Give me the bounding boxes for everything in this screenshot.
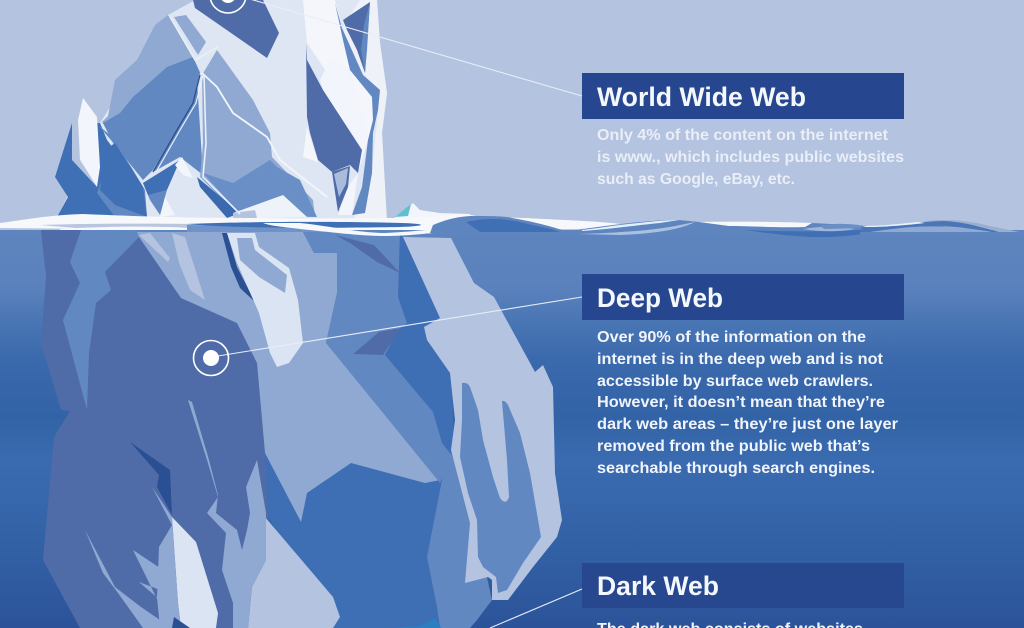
ocean	[0, 230, 1024, 628]
description: internet is in the deep web and is not	[597, 351, 883, 368]
heading: World Wide Web	[597, 82, 806, 112]
panel: world wide web	[582, 73, 904, 188]
description	[597, 127, 904, 188]
heading: Dark Web	[597, 571, 719, 601]
marker: world wide web	[210, 0, 246, 13]
leader lines	[218, 0, 582, 628]
description: Only 4% of the content on the internet	[597, 127, 888, 144]
description: removed from the public web that’s	[597, 438, 870, 455]
description	[597, 329, 898, 477]
marker: deep web	[194, 340, 228, 376]
teal glow at base	[392, 618, 441, 628]
ice cracks	[153, 17, 327, 214]
panel: dark web	[582, 563, 904, 628]
iceberg above water	[55, 0, 387, 222]
description: accessible by surface web crawlers.	[597, 373, 873, 390]
description: dark web areas – they’re just one layer	[597, 416, 898, 433]
description: Over 90% of the information on the	[597, 329, 866, 346]
description: is www., which includes public websites	[597, 149, 904, 166]
description: However, it doesn’t mean that they’re	[597, 394, 885, 411]
heading bar	[582, 73, 904, 119]
description: searchable through search engines.	[597, 460, 875, 477]
description: such as Google, eBay, etc.	[597, 171, 795, 188]
sky background	[0, 0, 1024, 232]
water surface and waves	[0, 203, 1024, 237]
iceberg below water	[41, 230, 562, 628]
heading: Deep Web	[597, 283, 723, 313]
panel: deep web	[582, 274, 904, 477]
heading bar	[582, 274, 904, 320]
heading bar	[582, 563, 904, 608]
